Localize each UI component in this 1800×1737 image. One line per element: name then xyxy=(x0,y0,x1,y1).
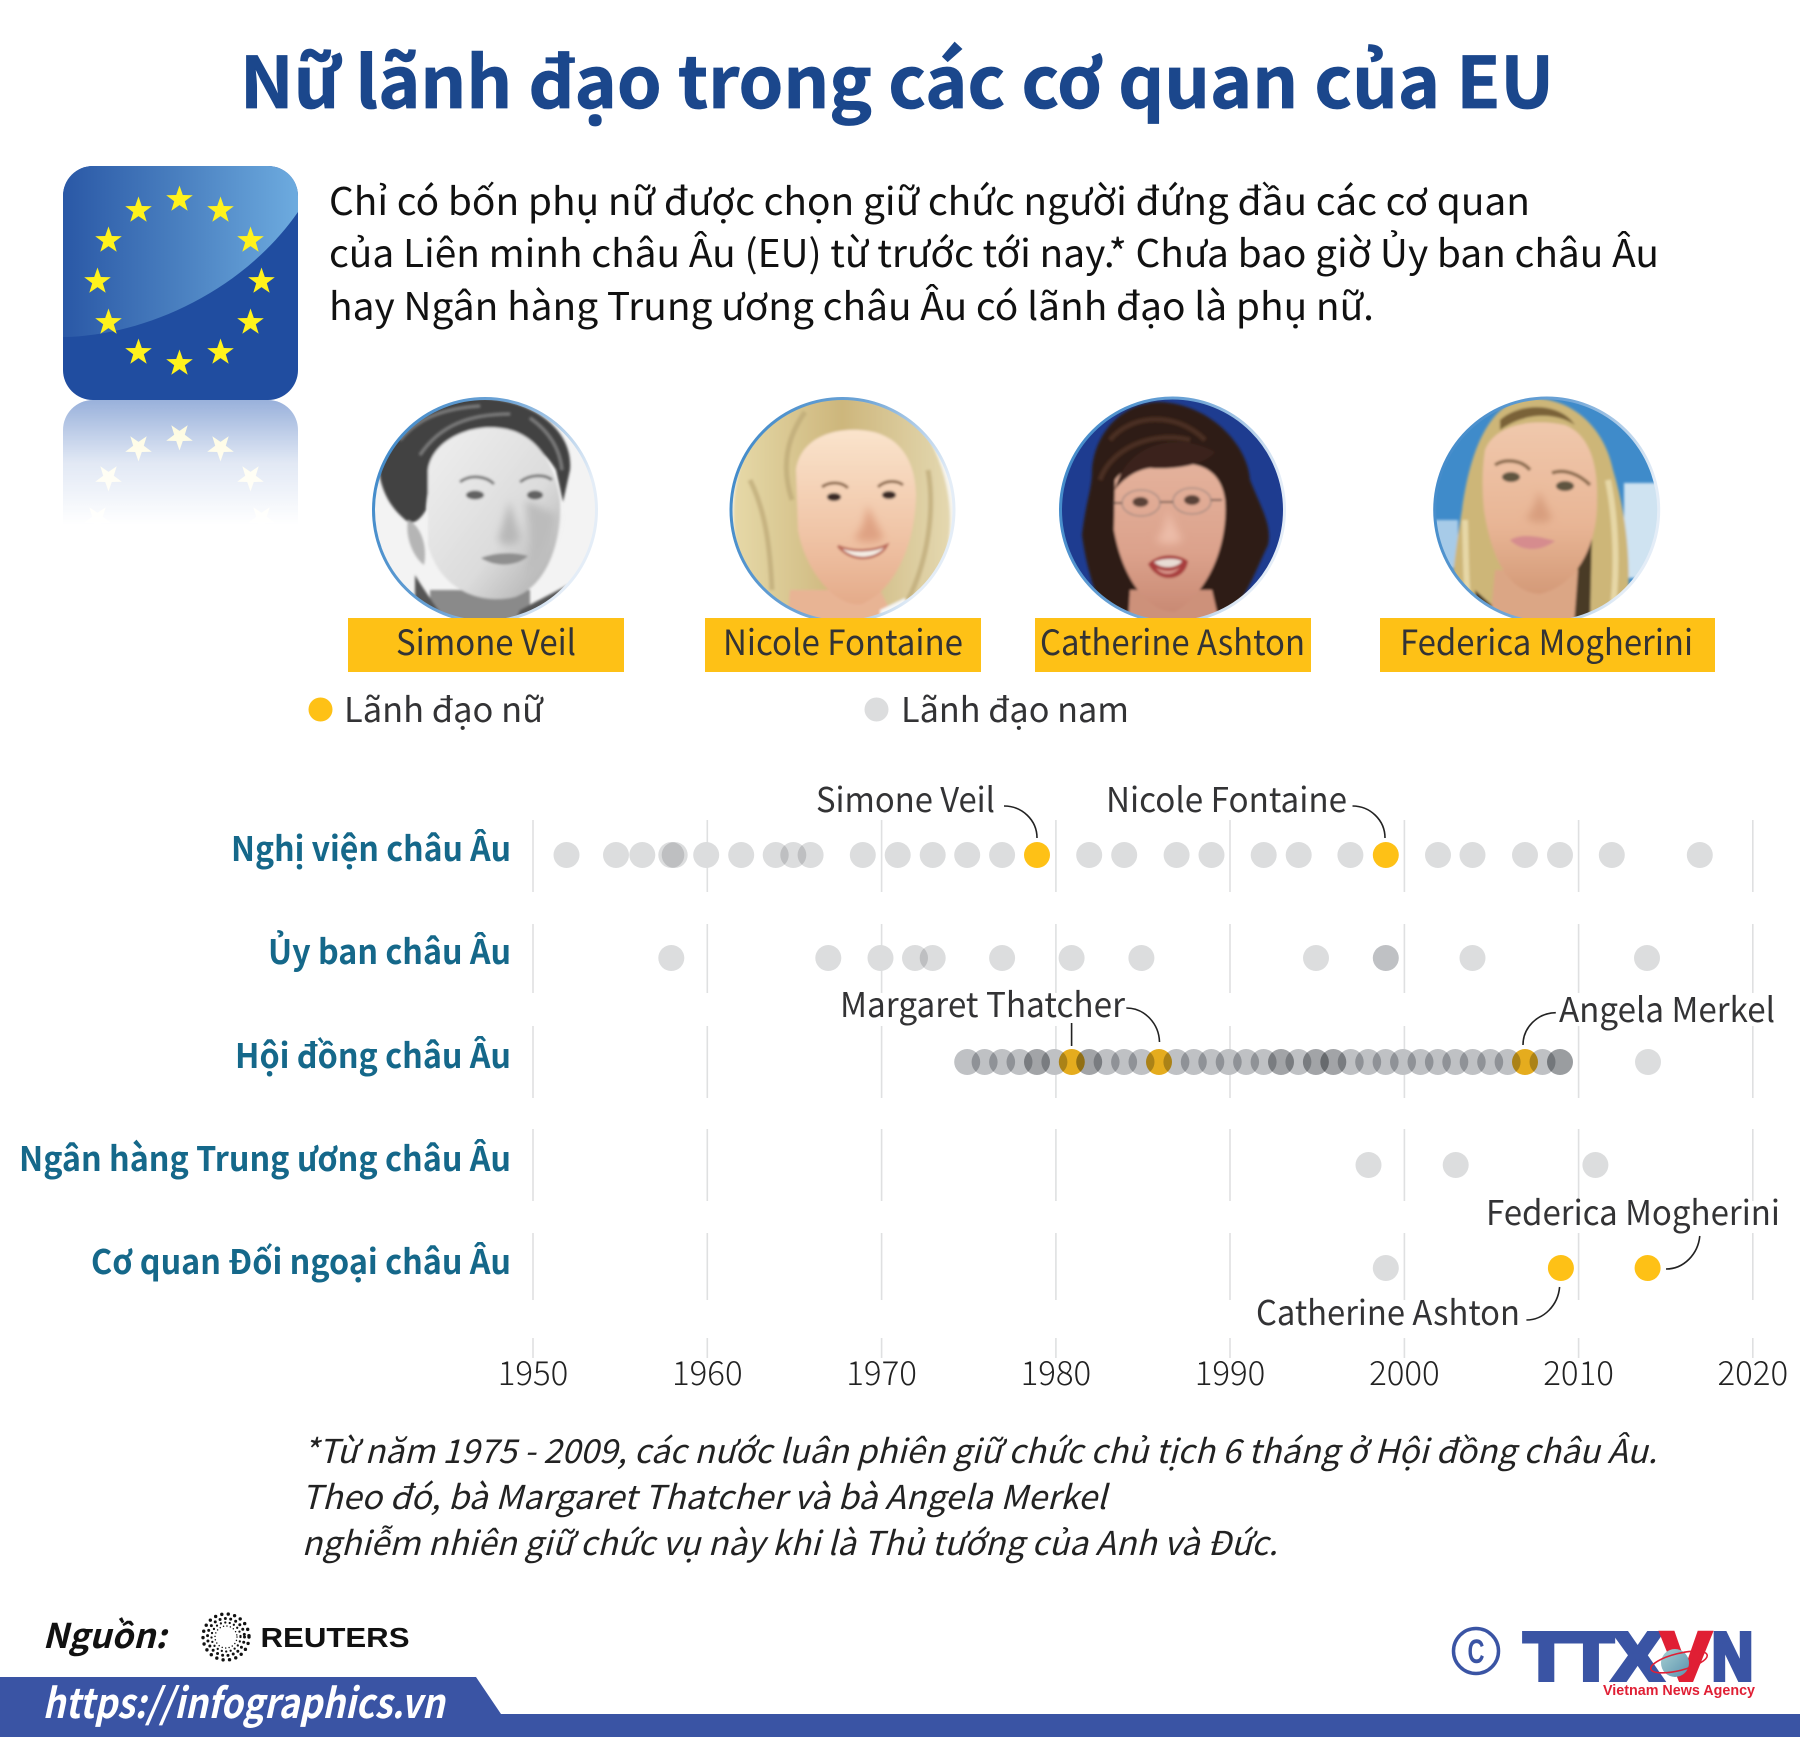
name label: Nicole Fontaine: Nicole Fontaine xyxy=(723,615,963,666)
annotation: Angela Merkel xyxy=(1523,983,1775,1045)
row: European External Action Service xyxy=(91,1235,1661,1284)
annotation: Simone Veil: Simone Veil xyxy=(816,773,995,822)
intro text xyxy=(329,171,1659,331)
row: European Commission: Ủy ban châu Âu xyxy=(268,925,511,974)
logo: TTXVN xyxy=(1524,1618,1756,1699)
annotation: Margaret Thatcher xyxy=(840,978,1160,1046)
name label: Federica Mogherini: Federica Mogherini xyxy=(1400,615,1693,666)
title: Nữ lãnh đạo trong các cơ quan của EU xyxy=(240,27,1554,129)
row: European Central Bank: Ngân hàng Trung ương châu Âu xyxy=(19,1132,511,1181)
axis year labels: 1950 xyxy=(498,1347,568,1395)
legend: female leader: Lãnh đạo nữ xyxy=(344,683,544,732)
Reuters wordmark: REUTERS xyxy=(260,1622,410,1653)
footnote: Theo đó, bà Margaret Thatcher và bà Angela Merkel xyxy=(302,1471,1110,1519)
logo: TTXVN: N xyxy=(1712,1620,1753,1694)
logo: TTXVN: Vietnam News Agency xyxy=(1603,1682,1756,1699)
icon: copyright mark: C xyxy=(1468,1633,1484,1671)
annotation: Federica Mogherini: Federica Mogherini xyxy=(1486,1186,1780,1235)
axis year labels: 1990 xyxy=(1195,1347,1265,1395)
annotation: Catherine Ashton: Catherine Ashton xyxy=(1256,1286,1520,1335)
footer banner xyxy=(0,1670,1800,1737)
icon: Reuters logo xyxy=(203,1614,249,1660)
intro text: của Liên minh châu Âu (EU) từ trước tới nay.* Chưa bao giờ Ủy ban châu Âu xyxy=(329,223,1659,278)
annotation: Nicole Fontaine xyxy=(1106,773,1385,838)
intro text: Chỉ có bốn phụ nữ được chọn giữ chức người đứng đầu các cơ quan xyxy=(329,171,1530,226)
portrait: Simone Veil xyxy=(373,398,597,640)
portrait: Federica Mogherini xyxy=(1432,397,1662,625)
name label: Simone Veil xyxy=(348,615,624,672)
row: European Central Bank xyxy=(19,1132,1608,1181)
axis year labels: 1980 xyxy=(1021,1347,1091,1395)
icon: copyright mark xyxy=(1454,1628,1498,1674)
footnote: *Từ năm 1975 - 2009, các nước luân phiên giữ chức chủ tịch 6 tháng ở Hội đồng châu Âu. xyxy=(303,1425,1657,1473)
annotation: Federica Mogherini xyxy=(1486,1186,1780,1269)
name label: Catherine Ashton: Catherine Ashton xyxy=(1040,615,1305,666)
row: European Council: Hội đồng châu Âu xyxy=(235,1029,511,1078)
name label: Simone Veil: Simone Veil xyxy=(396,615,576,666)
intro text: hay Ngân hàng Trung ương châu Âu có lãnh đạo là phụ nữ. xyxy=(329,276,1374,331)
logo: TTXVN: TTX xyxy=(1524,1620,1662,1694)
axis year labels: 2000 xyxy=(1369,1347,1440,1395)
axis year labels: 2020 xyxy=(1717,1347,1788,1395)
axis year labels: 1960 xyxy=(672,1347,743,1395)
footer banner: https://infographics.vn xyxy=(42,1670,447,1730)
icon: EU flag xyxy=(63,166,298,400)
portrait: Catherine Ashton xyxy=(1058,397,1288,625)
logo: TTXVN: V xyxy=(1661,1618,1711,1695)
row: European Commission xyxy=(268,925,1660,974)
row: European Parliament xyxy=(231,822,1713,871)
source: Nguồn: xyxy=(42,1609,169,1658)
annotation: Simone Veil xyxy=(816,773,1037,838)
annotation: Nicole Fontaine: Nicole Fontaine xyxy=(1106,773,1347,822)
axis year labels: 2010 xyxy=(1543,1347,1614,1395)
annotation: Angela Merkel: Angela Merkel xyxy=(1559,983,1775,1032)
legend: male leader: Lãnh đạo nam xyxy=(901,683,1129,732)
row: European External Action Service: Cơ quan Đối ngoại châu Âu xyxy=(91,1235,511,1284)
portrait: Nicole Fontaine xyxy=(730,397,956,640)
footnote xyxy=(302,1425,1657,1565)
axis year labels xyxy=(498,1347,1788,1395)
axis year labels: 1970 xyxy=(846,1347,917,1395)
chart gridlines xyxy=(533,820,1753,1358)
row: European Parliament: Nghị viện châu Âu xyxy=(231,822,511,871)
footnote: nghiễm nhiên giữ chức vụ này khi là Thủ tướng của Anh và Đức. xyxy=(302,1517,1278,1565)
row: European Council xyxy=(235,1029,1661,1078)
annotation: Margaret Thatcher: Margaret Thatcher xyxy=(840,978,1126,1027)
icon: EU flag reflection xyxy=(63,400,298,506)
